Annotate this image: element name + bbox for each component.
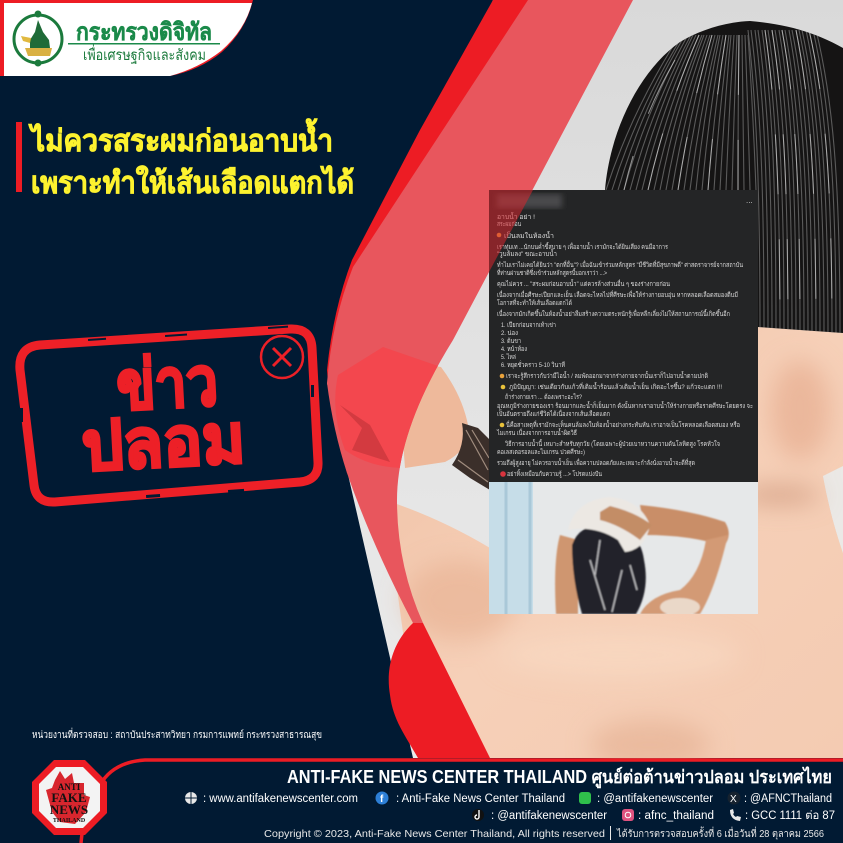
post text: รวมถึงผู้สูงอายุ ไม่ควรอาบน้ำเย็น เพื่อความปลอดภัยและเหมาะกำลังนั่งอาบน้ำจะดีที่สุด (497, 458, 695, 467)
post text: ภูมิปัญญา: เช่นเดียวกับแก้วที่เติมน้ำร้อนแล้วเติมน้ำเย็น เกิดอะไรขึ้น? แก้วจะแตก !!! (509, 382, 722, 391)
anti-fake news logo (32, 760, 107, 835)
contact row two (472, 809, 835, 822)
post text: เราจะรู้สึกราวกับว่ามีไอน้ำ / ลมพัดออกมาจากร่างกายจากนั้นเราก็ไปอาบน้ำตามปกติ (506, 371, 708, 380)
fake news stamp (19, 326, 318, 502)
post text: คอเลสเตอรอลและไมเกรน ปวดศีรษะ) (497, 448, 585, 456)
post text: วิธีการอาบน้ำนี้ เหมาะสำหรับทุกวัย (โดยเฉพาะผู้ป่วยเบาหวานความดันโลหิตสูง โรคหัวใจ (505, 439, 720, 448)
post text: ถ้าร่างกายเรา ... ต้องเพราะอะไร? (505, 393, 582, 401)
contact row one: : www.antifakenewscenter.com (203, 793, 358, 805)
photo backdrop (327, 0, 843, 758)
footer background (81, 760, 843, 843)
contact row one: : @AFNCThailand (744, 793, 832, 805)
post text: เนื่องจากเมื่อศีรษะเปียกและเย็น เลือดจะไหลไปที่ศีรษะเพื่อให้ร่างกายอบอุ่น หากหลอดเลือดสมองตีบมี (497, 290, 738, 299)
bare back and shoulders (385, 327, 843, 758)
icon: tiktok (472, 809, 484, 821)
post text: อาบน้ำ อย่า ! (497, 212, 535, 221)
post text: อุณหภูมิร่างกายของเรา ร้อนมากและน้ำก็เย็นมาก ดังนั้นหากเราอาบน้ำให้ร่างกายหรือราดศีรษะโดยตรง จะ (497, 401, 753, 410)
post text: เนื่องจากมักเกิดขึ้นในห้องน้ำอย่าลืมสร้างความตระหนักรู้เพื่อหลีกเลี่ยงไม่ให้สถานการณ์นี้เกิดขึ้นอีก (497, 309, 730, 318)
woman washing hair (555, 497, 729, 616)
logo text: NEWS (50, 802, 88, 817)
icon: facebook: f (380, 794, 384, 805)
icon: phone (730, 809, 741, 821)
verification note: ได้รับการตรวจสอบครั้งที่ 6 เมื่อวันที่ 28 ตุลาคม 2566 (616, 826, 824, 840)
light gap beside neck (823, 466, 843, 553)
post text: 1. เปียกก่อนจากเท้าเข่า (501, 321, 556, 329)
panel: shower photo (489, 482, 758, 616)
stamp word one: ข่าว (115, 343, 220, 425)
icon: x: X (730, 794, 737, 805)
post text: ทำไมเราไม่เคยได้ยินว่า "ตกที่อื่น"? เมื่อฉันเข้าร่วมหลักสูตร "มีชีวิตที่มีสุขภาพดี" ศาสตราจารย์จากสถาบัน (497, 260, 743, 269)
post text: อย่าทิ้งเหมือนกับความรู้ ...> โปรดแบ่งปัน (507, 469, 602, 478)
hair on head (605, 21, 843, 335)
post text: "วูบล้มลง" ขณะอาบน้ำ (497, 249, 557, 258)
panel: footer (32, 760, 843, 843)
hand gripping hair (400, 362, 468, 468)
icon: ministry emblem (14, 10, 62, 66)
ministry tagline: เพื่อเศรษฐกิจและสังคม (83, 44, 206, 64)
post background (489, 190, 758, 482)
panel: facebook post screenshot (489, 190, 758, 482)
post text: เป็นอันตรายถึงแก่ชีวิตได้เนื่องจากเส้นเลือดแตก (497, 409, 610, 418)
icon: line (579, 792, 591, 804)
headline (16, 118, 354, 200)
hand tinted under pink band (335, 347, 438, 468)
post text: คุณไม่ควร ... "สระผมก่อนอาบน้ำ" แต่ควรล้างส่วนอื่น ๆ ของร่างกายก่อน (497, 279, 670, 288)
red swoosh band (327, 0, 540, 473)
shower backdrop (533, 482, 758, 614)
logo text: ANTI (58, 782, 81, 792)
icon: instagram (622, 809, 634, 821)
post text: 6. หยุดชั่วคราว 5-10 วินาที (501, 360, 565, 369)
icon: facebook (376, 792, 388, 805)
stamp wear marks (19, 326, 314, 498)
contact row one: : @antifakenewscenter (597, 793, 713, 805)
contact row one (185, 792, 832, 805)
headline: ไม่ควรสระผมก่อนอาบน้ำ (28, 118, 333, 158)
pink band over post corner (489, 190, 533, 272)
photo: man with wet hair (327, 0, 843, 770)
ministry name: กระทรวงดิจิทัล (76, 19, 212, 46)
logo text: THAILAND (53, 818, 86, 824)
post text: 3. ต้นขา (501, 337, 521, 345)
lower red curved blob (389, 623, 490, 758)
logo text: FAKE (51, 790, 87, 805)
stamp x icon (261, 336, 303, 378)
wet strand in hand (452, 423, 490, 490)
headline: เพราะทำให้เส้นเลือดแตกได้ (31, 165, 354, 200)
shower door glass (489, 482, 533, 614)
post text: โอกาสที่จะทำให้เส้นเลือดแตกได้ (497, 298, 572, 307)
ministry logo panel (0, 0, 253, 76)
icon: x (728, 792, 740, 805)
contact row one: : Anti-Fake News Center Thailand (396, 793, 565, 805)
blurred poster name (497, 194, 562, 208)
source line: หน่วยงานที่ตรวจสอบ : สถาบันประสาทวิทยา กรมการแพทย์ กระทรวงสาธารณสุข (32, 727, 322, 741)
more menu: ... (746, 196, 753, 205)
pink translucent swoosh band (327, 0, 633, 623)
post text: ไมเกรน เนื่องจากการอาบน้ำผิดวิธี (496, 428, 577, 437)
post text: สระผมก่อน (497, 221, 521, 228)
contact row two: : afnc_thailand (638, 810, 714, 822)
post text (496, 212, 753, 478)
post text: นี่คือสาเหตุที่เรามักจะเห็นคนล้มลงในห้องน้ำอย่างกระทันหัน เราอาจเป็นโรคหลอดเลือดสมอง หรือ (506, 420, 740, 429)
logo text (50, 782, 88, 824)
post text: 5. ไหล่ (501, 353, 516, 361)
door frame stripes (506, 482, 530, 614)
post text: เราทุ่มเท ...นักบนค่ำขี้สบาย ๆ เพื่ออาบน้ำ เรามักจะได้ยินเสียง คนมีอาการ (497, 242, 668, 251)
contact row two: : @antifakenewscenter (491, 810, 607, 822)
skin shading (405, 360, 830, 770)
post text: 4. หน้าท้อง (501, 345, 527, 353)
post text: 2. น่อง (501, 330, 518, 337)
logo hand (46, 771, 90, 824)
post text: เป็นลมในห้องน้ำ (504, 231, 554, 240)
strand highlights (458, 430, 489, 482)
copyright line: Copyright © 2023, Anti-Fake News Center Thailand, All rights reserved (264, 828, 605, 840)
icon: globe (185, 792, 197, 804)
post text: ที่ท่านผ่านชาติซึ่งเข้าร่วมหลักสูตรนี้บอกเราว่า ...> (497, 268, 607, 277)
footer red curve (81, 760, 843, 843)
contact row two: : GCC 1111 ต่อ 87 (745, 810, 835, 822)
stamp word two: ปลอม (80, 401, 247, 485)
